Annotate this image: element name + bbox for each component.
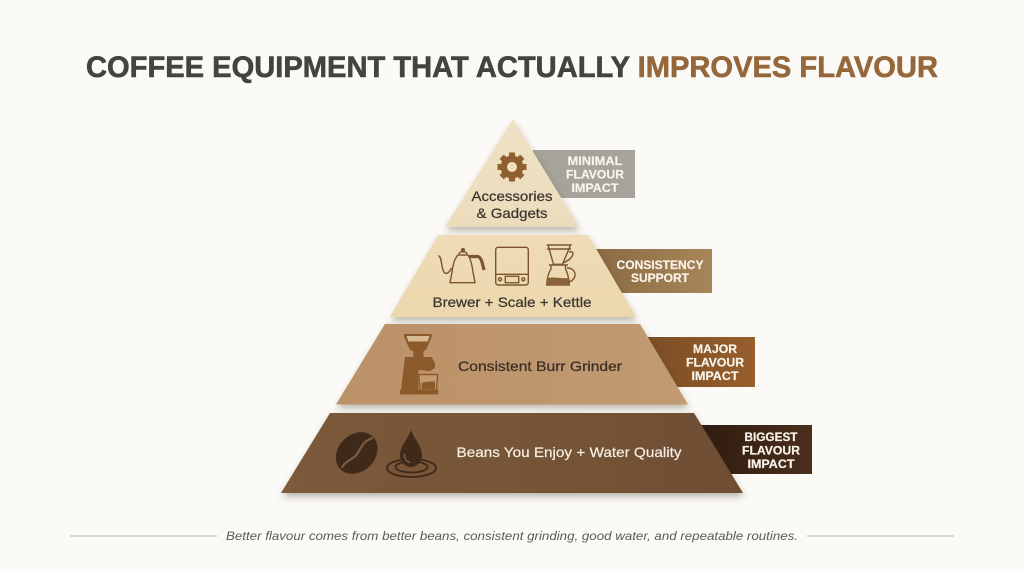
pyramid tier 3: consistent burr grinder [336, 324, 688, 404]
pyramid tier 4: beans and water [281, 413, 743, 493]
label: major flavour impact [648, 337, 755, 387]
label: consistency support [592, 249, 712, 293]
label: minimal flavour impact: MINIMAL [568, 156, 622, 168]
icon: kettle [438, 249, 484, 283]
text: brewer + scale + kettle: Brewer + Scale + Kettle [432, 294, 592, 310]
footer divider left [70, 535, 217, 537]
label: consistency support: SUPPORT [631, 273, 689, 285]
label: minimal flavour impact: FLAVOUR [566, 170, 625, 182]
text: consistent burr grinder: Consistent Burr Grinder [458, 358, 622, 374]
label: biggest flavour impact: FLAVOUR [742, 446, 801, 458]
icon: coffee bean [327, 424, 386, 482]
label: minimal flavour impact [533, 150, 635, 198]
label: biggest flavour impact: BIGGEST [744, 432, 798, 444]
label: biggest flavour impact [700, 425, 812, 474]
label: major flavour impact: IMPACT [692, 371, 738, 383]
icon: burr grinder [400, 334, 438, 394]
icon: gear [498, 152, 526, 182]
label: minimal flavour impact: IMPACT [572, 183, 618, 195]
pyramid tier 1: accessories and gadgets [445, 119, 579, 227]
label: biggest flavour impact: IMPACT [748, 459, 794, 471]
label: consistency support: CONSISTENCY [616, 260, 704, 272]
icon: water drop with ripples [387, 430, 436, 477]
icon: scale [496, 247, 528, 285]
text: accessories and gadgets: Accessories [472, 188, 552, 204]
title: COFFEE EQUIPMENT THAT ACTUALLY IMPROVES FLAVOUR [86, 51, 938, 84]
pyramid tier 2: brewer, scale, kettle [390, 235, 636, 317]
text: accessories and gadgets: & Gadgets [476, 205, 548, 221]
footer divider right [807, 535, 954, 537]
icon: pour-over brewer [547, 245, 575, 286]
text: beans you enjoy + water quality: Beans You Enjoy + Water Quality [456, 444, 682, 460]
label: major flavour impact: FLAVOUR [686, 358, 745, 370]
label: major flavour impact: MAJOR [693, 344, 738, 356]
footer caption: Better flavour comes from better beans, consistent grinding, good water, and repeatable routines. [226, 529, 798, 543]
